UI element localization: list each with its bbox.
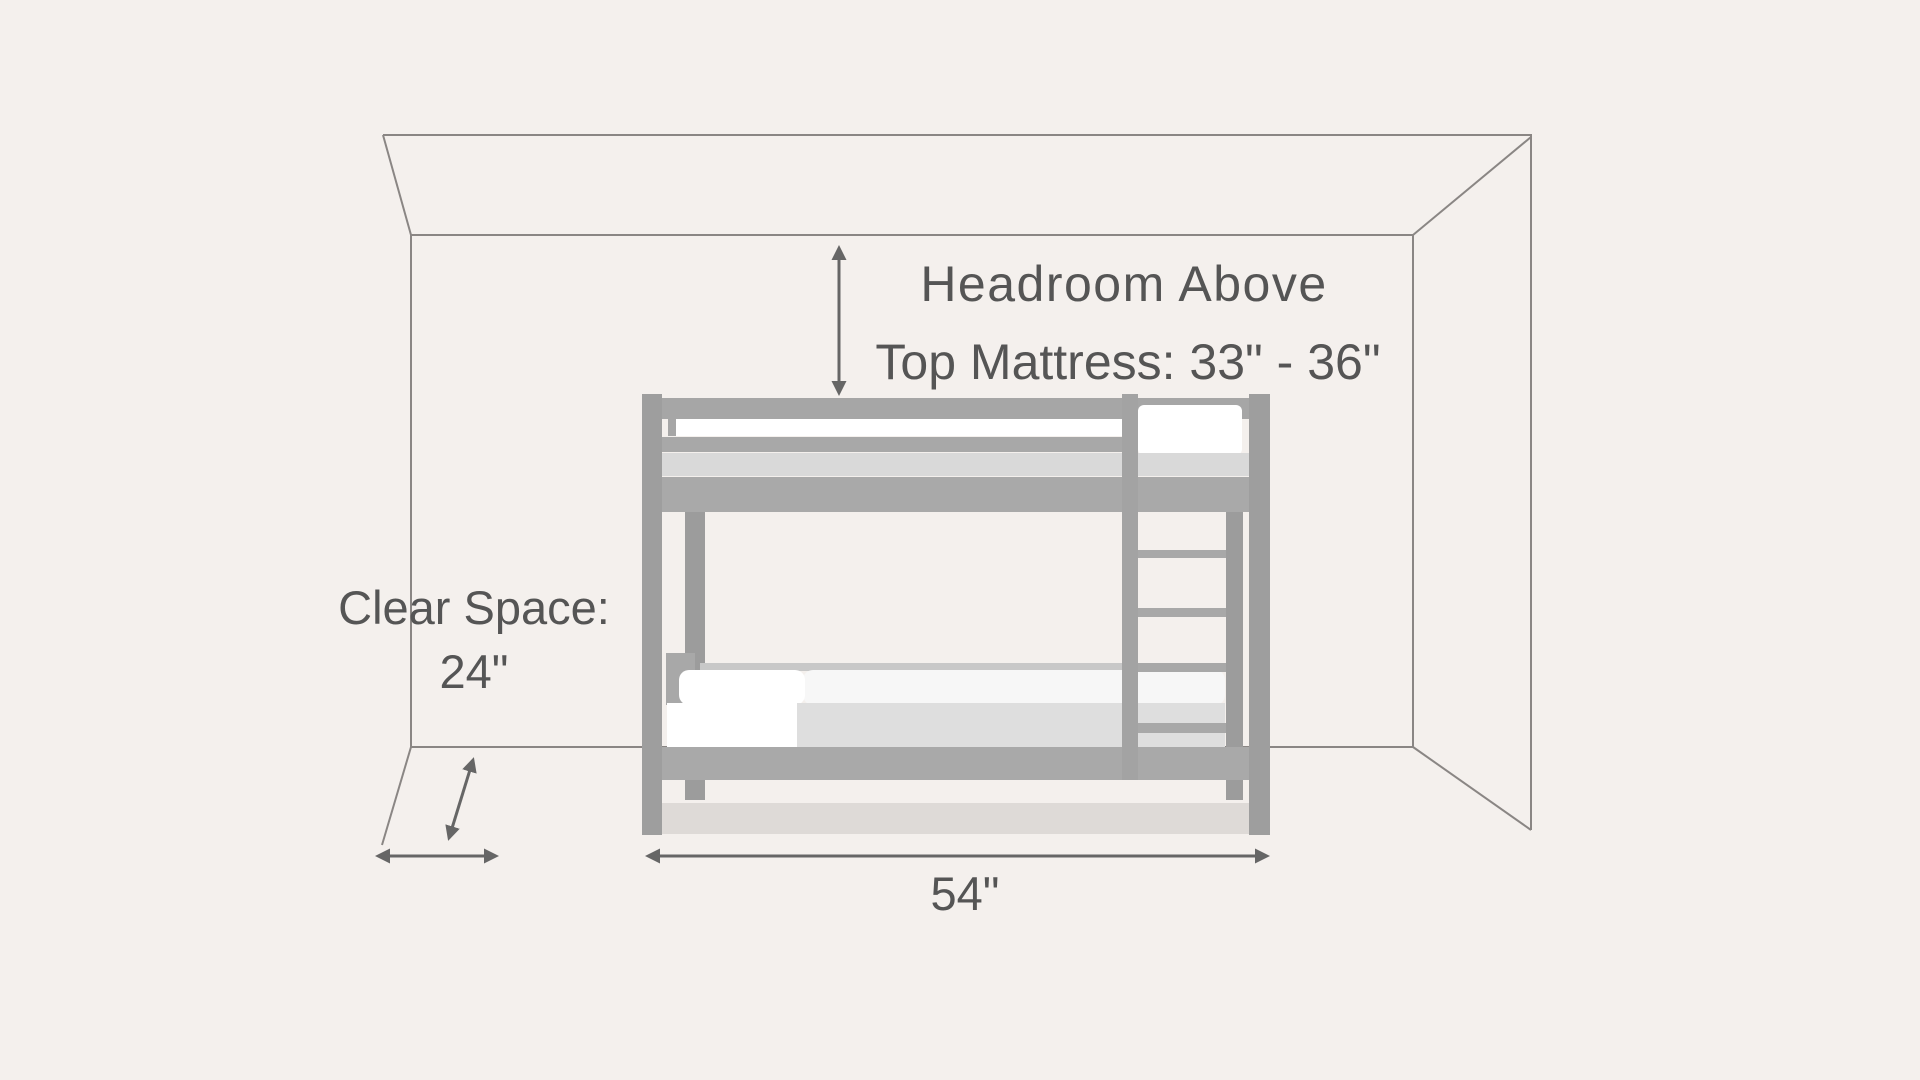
bunk bed: [642, 394, 1270, 835]
inner legs: [685, 512, 705, 800]
room outline: [382, 135, 1531, 845]
bottom frame: [662, 747, 1249, 780]
label: headroom: Headroom Above: [920, 256, 1328, 312]
label: width: 54": [931, 867, 999, 920]
shadow: [662, 803, 1249, 834]
label: clear space: [338, 581, 610, 698]
label: clear space: Clear Space:: [338, 581, 610, 634]
label: headroom: Top Mattress: 33" - 36": [875, 334, 1381, 390]
bottom mattress: [666, 653, 695, 705]
ladder: [1122, 394, 1138, 780]
arrow: headroom: [838, 248, 840, 393]
top bunk: [662, 398, 1249, 419]
arrow: clear space depth: [449, 760, 473, 838]
label: headroom: [875, 256, 1381, 390]
posts: [642, 394, 662, 835]
arrow: width 54: [648, 854, 1267, 858]
arrow: clear space horizontal: [378, 854, 496, 858]
label: clear space: 24": [440, 645, 508, 698]
